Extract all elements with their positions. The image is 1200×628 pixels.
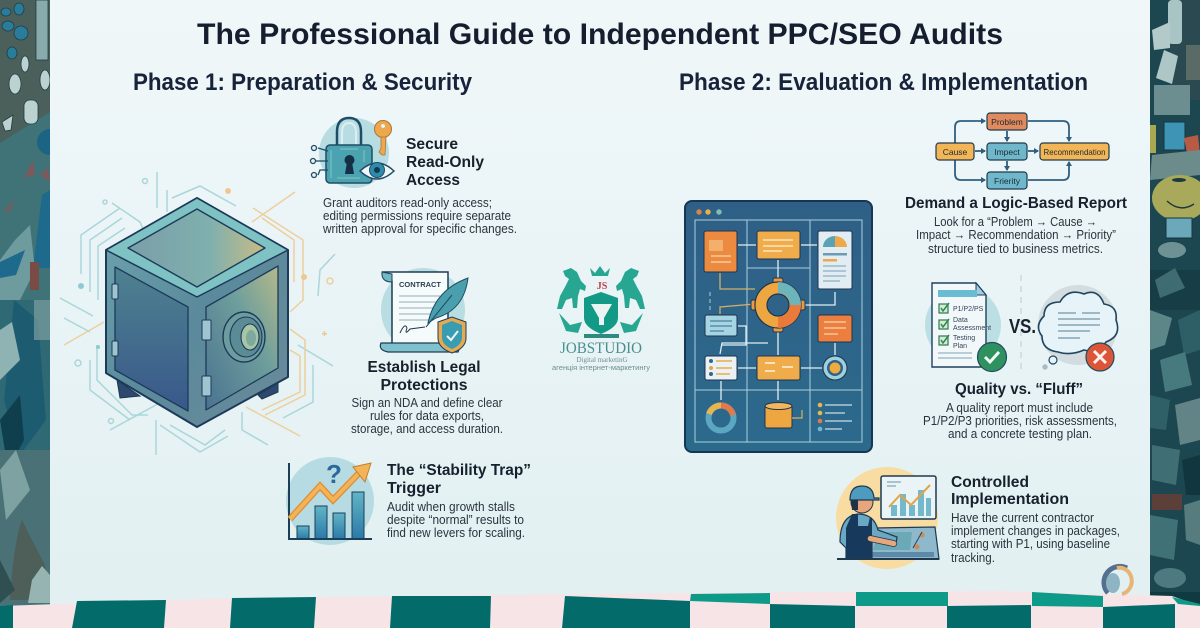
text: controlled implementation: Have the current contractor [951, 511, 1094, 525]
heading: phase 1: Phase 1: Preparation & Security [133, 69, 473, 96]
text: controlled implementation: Implementation [951, 491, 1069, 508]
icon: quality checklist document: Data [953, 317, 968, 324]
text: quality vs fluff: P1/P2/P3 priorities, risk assessments, [923, 414, 1117, 428]
icon: padlock with key and eye [310, 118, 394, 188]
dashboard blue card [705, 315, 737, 336]
icon: quality checklist document: Plan [953, 343, 967, 350]
logo horse left [557, 268, 586, 309]
icon: quality checklist document: P1/P2/PS [953, 306, 984, 313]
text: controlled implementation: starting with P1, using baseline [951, 537, 1110, 551]
logo: jobstudio crest: агенція інтернет-маркетингу [552, 364, 651, 372]
text: secure read-only access: Access [406, 172, 460, 189]
box recommendation [1040, 143, 1109, 160]
dashboard gear [751, 278, 805, 332]
text: stability trap trigger: The “Stability Trap” [387, 462, 531, 479]
dashboard report card [818, 231, 852, 289]
bottom checker strip [0, 591, 1200, 628]
text: secure read-only access [322, 136, 517, 236]
logo crown [590, 266, 610, 276]
safe dial [223, 312, 265, 362]
text: establish legal protections [351, 359, 503, 436]
dashboard cylinder [765, 402, 802, 428]
dashboard legend [818, 403, 852, 431]
icon: contract with quill and shield [380, 268, 468, 353]
text: establish legal protections: rules for data exports, [370, 409, 484, 423]
text: stability trap trigger [387, 462, 531, 540]
icon: rising chart with question mark [286, 457, 374, 545]
title: The Professional Guide to Independent PPC/SEO Audits [197, 18, 1003, 51]
dashboard orange card [704, 231, 737, 272]
dashboard donut chart [708, 405, 734, 430]
text: establish legal protections: Protections [380, 377, 468, 394]
text: secure read-only access: Secure [406, 136, 458, 153]
flow diagram: problem cause impact recommendation priority [936, 113, 1109, 189]
text: controlled implementation: tracking. [951, 551, 995, 565]
dashboard yellow card [757, 231, 800, 259]
text: establish legal protections: Sign an NDA and define clear [352, 396, 502, 410]
text: establish legal protections: storage, and access duration. [351, 422, 503, 436]
text: versus with divider: VS. [1009, 316, 1036, 338]
text: controlled implementation: implement changes in packages, [951, 524, 1120, 538]
text: controlled implementation [951, 474, 1120, 565]
text: secure read-only access: Read-Only [406, 154, 484, 171]
watermark icon [1104, 566, 1132, 594]
box cause [936, 143, 974, 160]
icon: technician at control console [836, 467, 939, 569]
logo: jobstudio crest: JS [597, 281, 608, 292]
dashboard target circle [823, 356, 847, 380]
text: stability trap trigger: Audit when growth stalls [387, 500, 515, 514]
logo horse right [616, 268, 645, 309]
box problem [987, 113, 1027, 130]
text: quality vs fluff: Quality vs. “Fluff” [955, 381, 1083, 398]
box cause: Cause [943, 147, 968, 157]
box priority: Frierity [994, 176, 1021, 186]
box priority [987, 172, 1027, 189]
icon: quality checklist document: Testing [953, 335, 975, 342]
box problem: Problem [991, 117, 1023, 127]
logo: jobstudio crest: Digital marketinG [576, 356, 628, 364]
text: establish legal protections: Establish Legal [368, 359, 480, 376]
text: quality vs fluff: A quality report must include [946, 401, 1093, 415]
dashboard yellow exchange card [757, 356, 800, 380]
text: versus with divider [1009, 275, 1036, 373]
text: secure read-only access: Grant auditors read-only access; [323, 196, 492, 210]
illustration: workflow dashboard [685, 201, 872, 452]
text: quality vs fluff: and a concrete testing plan. [948, 427, 1092, 441]
text: quality vs fluff [923, 381, 1117, 441]
text: demand a logic-based report: Impact → Recommendation → Priority” [916, 228, 1116, 242]
text: demand a logic-based report [905, 195, 1128, 256]
heading: phase 2: Phase 2: Evaluation & Implementation [679, 69, 1088, 96]
logo shield [584, 292, 618, 334]
icon: quality checklist document: Assessment [953, 325, 991, 332]
box recommendation: Recommendation [1044, 147, 1106, 157]
right doodle band [1150, 0, 1200, 606]
logo: jobstudio crest: JOBSTUDIO [560, 340, 642, 357]
box impact [987, 143, 1027, 160]
text: demand a logic-based report: structure tied to business metrics. [928, 242, 1103, 256]
dashboard orange small card [818, 315, 852, 342]
icon: contract with quill and shield: CONTRACT [399, 280, 441, 289]
text: demand a logic-based report: Demand a Logic-Based Report [905, 195, 1128, 212]
text: stability trap trigger: find new levers for scaling. [387, 526, 525, 540]
logo: jobstudio crest [552, 266, 651, 372]
left doodle band [0, 0, 50, 606]
illustration: safe with circuit lines [60, 172, 335, 455]
text: secure read-only access: written approval for specific changes. [322, 222, 517, 236]
text: stability trap trigger: despite “normal” results to [387, 513, 524, 527]
text: controlled implementation: Controlled [951, 474, 1029, 491]
box impact: Impect [994, 147, 1020, 157]
text: secure read-only access: editing permissions require separate [323, 209, 511, 223]
icon: quality checklist document [925, 283, 1006, 372]
icon: rising chart with question mark: ? [326, 459, 342, 489]
text: demand a logic-based report: Look for a “Problem → Cause → [934, 215, 1097, 229]
dashboard list card [705, 356, 737, 380]
icon: fluff thought cloud [1038, 285, 1118, 371]
dashboard connectors [720, 245, 835, 400]
text: stability trap trigger: Trigger [387, 480, 441, 497]
